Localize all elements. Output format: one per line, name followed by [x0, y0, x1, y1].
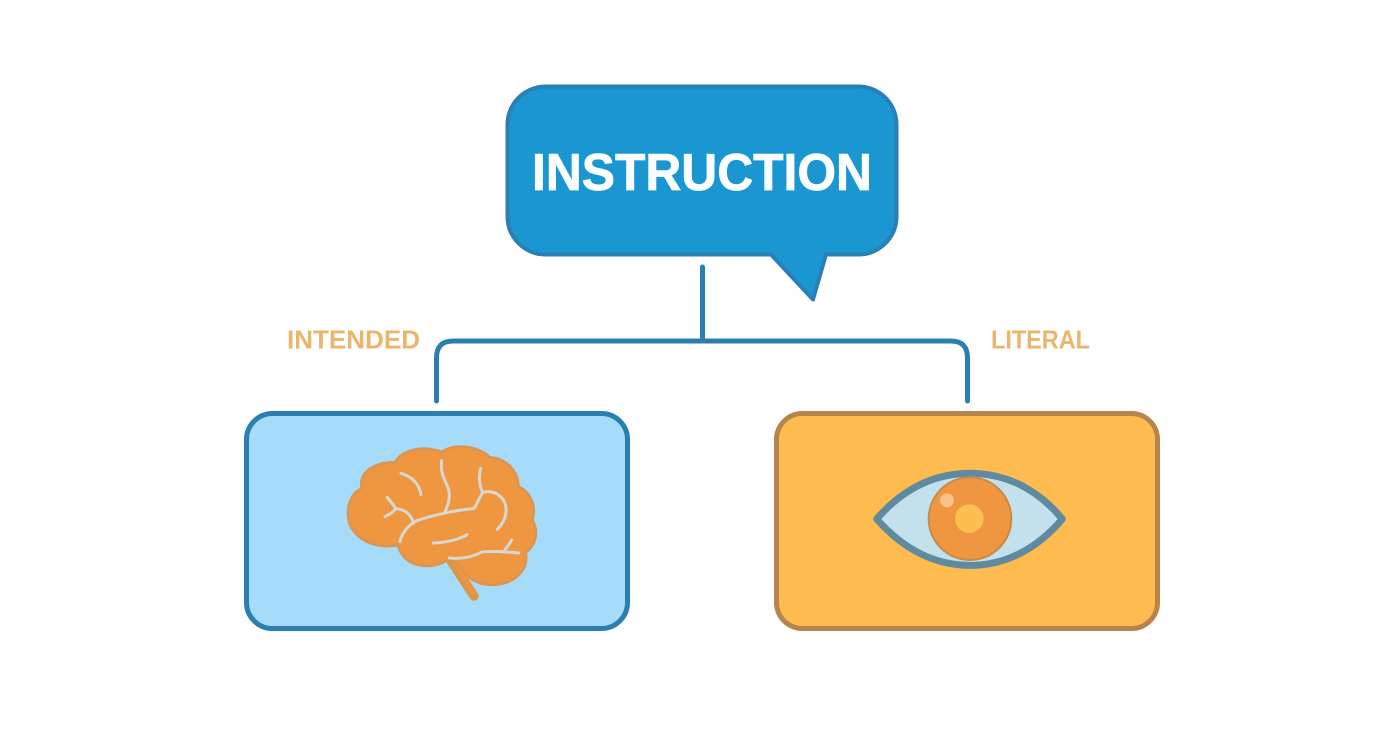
- connector lines: [436, 267, 968, 401]
- panel: intended: [246, 414, 628, 628]
- label: intended: INTENDED: [287, 324, 420, 354]
- panel: literal: [776, 414, 1158, 628]
- speech bubble: instruction: [508, 86, 897, 300]
- icon: brain: [348, 447, 536, 596]
- icon: eye: [877, 473, 1062, 565]
- label: literal: LITERAL: [991, 324, 1090, 354]
- heading: instruction: INSTRUCTION: [532, 144, 872, 202]
